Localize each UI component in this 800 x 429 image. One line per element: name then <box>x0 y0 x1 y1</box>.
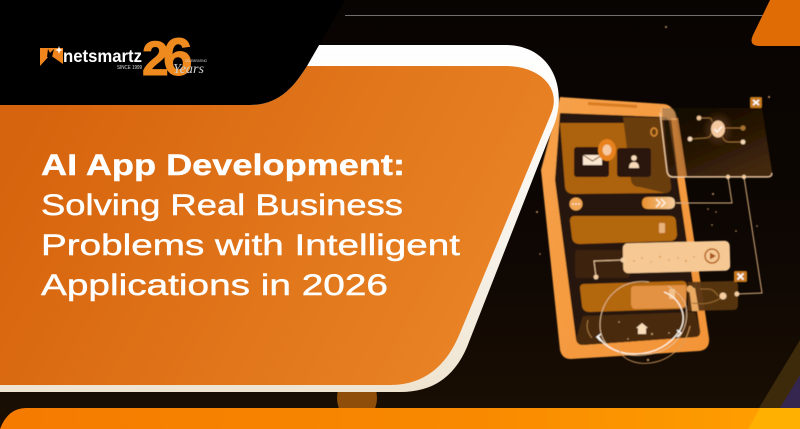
dots button <box>570 198 582 210</box>
logo 26 years: 6 <box>163 28 192 87</box>
right dark card <box>688 281 738 311</box>
thin top rule <box>345 15 765 16</box>
mail tile <box>574 147 609 177</box>
arrow pill <box>642 197 675 209</box>
home icon <box>636 323 648 334</box>
third dark card <box>575 250 630 278</box>
phone speaker <box>588 102 637 108</box>
white panel border <box>0 45 559 392</box>
connector dots <box>686 175 746 300</box>
phone body <box>541 97 709 359</box>
circular rings <box>587 282 690 363</box>
close icon top <box>750 97 762 108</box>
bottom nav band <box>576 312 700 345</box>
glass panel <box>660 107 772 177</box>
title line 2: Solving Real Business <box>41 189 403 222</box>
sparkle dots <box>536 26 770 361</box>
logo <box>40 28 207 87</box>
title <box>41 149 461 302</box>
logo years script: Years <box>173 62 205 77</box>
orange title panel <box>0 66 554 385</box>
nav chevrons <box>597 330 681 341</box>
phone illustration <box>536 26 772 363</box>
upper card shade <box>623 117 671 193</box>
logo flag mark <box>40 46 63 66</box>
upper card <box>560 123 671 194</box>
logo 26 years: 2 <box>142 33 169 86</box>
title line 4: Applications in 2026 <box>41 269 388 302</box>
bottom orange bar <box>0 408 800 429</box>
phone screen <box>555 113 700 345</box>
glow circle behind panel <box>337 374 377 422</box>
close icon lower <box>734 271 747 282</box>
link left of pill <box>594 258 625 279</box>
logo celebrating: CELEBRATING <box>185 59 207 63</box>
connector lines <box>676 177 762 304</box>
black logo corner <box>0 0 345 105</box>
second card <box>570 216 677 244</box>
light message pill <box>623 241 730 273</box>
fourth card <box>580 281 687 312</box>
right frame highlight over dark card <box>689 288 699 311</box>
logo wordmark: netsmartz <box>63 46 142 66</box>
title line 1: AI App Development: <box>41 149 405 182</box>
top right orange tab <box>752 0 800 46</box>
small ring <box>651 128 657 136</box>
notification badge <box>598 139 616 161</box>
title line 3: Problems with Intelligent <box>41 229 461 262</box>
logo since: SINCE 1999 <box>117 65 142 71</box>
bottom right purple shape <box>759 340 800 408</box>
person tile <box>617 148 651 177</box>
